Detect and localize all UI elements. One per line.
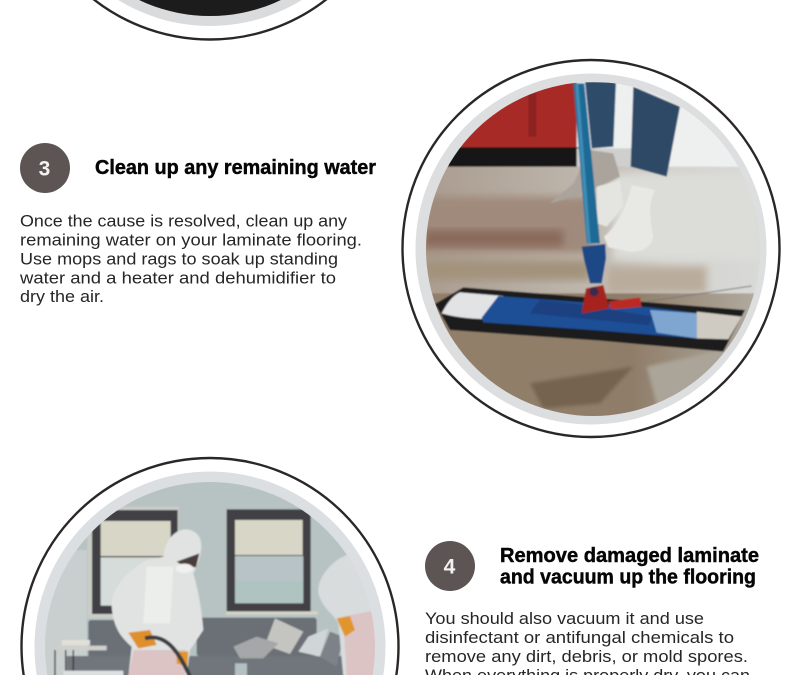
step 3 body text: Use mops and rags to soak up standing [20,250,338,268]
step 4 badge: 4 [444,556,456,578]
step 4 heading: Remove damaged laminate [500,544,759,567]
step 3 heading: Clean up any remaining water [95,156,376,179]
step 4 badge [425,541,475,591]
step 4 heading: and vacuum up the flooring [500,566,756,588]
step 4 body text [425,610,750,675]
step 4 body text: disinfectant or antifungal chemicals to [425,629,734,647]
step 4 heading [500,544,759,588]
step 3 body text: dry the air. [20,288,104,306]
circular photo: workers in protective suits vacuuming a living room [22,458,398,675]
step 3 body text: water and a heater and dehumidifier to [19,270,336,288]
step 3 body text: Once the cause is resolved, clean up any [20,212,348,230]
step 3 badge: 3 [39,158,50,180]
step 3 body text: remaining water on your laminate flooring. [20,232,362,250]
circular photo: mopping a wet laminate floor [402,60,780,437]
step 3 body text [19,212,362,306]
circular photo frame: previous step (cropped at top) [22,0,398,40]
step 4 body text: You should also vacuum it and use [425,610,704,628]
step 4 body text: remove any dirt, debris, or mold spores. [425,648,748,666]
step 3 badge [20,143,70,193]
